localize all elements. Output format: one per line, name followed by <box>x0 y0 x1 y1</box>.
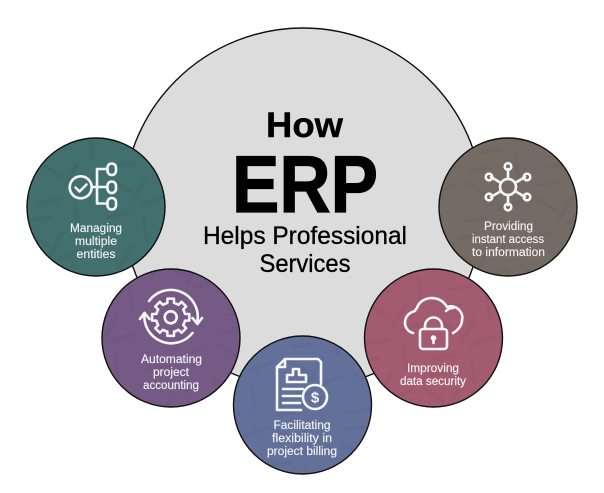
label: project <box>153 367 190 379</box>
label: project billing <box>267 446 337 458</box>
icon: network hub <box>486 163 530 210</box>
label <box>472 221 545 259</box>
label <box>400 363 466 388</box>
title: ERP <box>232 140 378 230</box>
label: Providing <box>484 221 533 233</box>
icon: gear with arrows <box>140 290 202 343</box>
panel: automating project accounting <box>102 269 240 407</box>
label: Improving <box>407 363 459 375</box>
title: Helps Professional <box>203 222 407 250</box>
panel: facilitating flexibility in project billing <box>234 336 372 474</box>
icon: billing document: $ <box>311 390 320 406</box>
panel: providing instant access to information <box>439 138 577 276</box>
label: multiple <box>75 236 117 248</box>
title: Services <box>260 250 350 278</box>
label <box>70 223 122 261</box>
label <box>141 354 202 392</box>
label: to information <box>472 247 545 259</box>
icon: cloud lock <box>405 298 462 349</box>
panel: managing multiple entities <box>27 138 165 276</box>
label: entities <box>76 249 116 261</box>
panel: improving data security <box>364 269 502 407</box>
label: accounting <box>143 380 199 392</box>
central circle <box>123 28 483 388</box>
title: How <box>266 106 344 145</box>
label: flexibility in <box>272 433 332 445</box>
title <box>203 106 407 278</box>
label: instant access <box>472 234 544 246</box>
icon: entity hierarchy <box>70 164 116 210</box>
label <box>267 420 337 458</box>
label: Facilitating <box>274 420 330 432</box>
label: data security <box>400 376 466 388</box>
label: Automating <box>141 354 202 366</box>
label: Managing <box>70 223 122 235</box>
